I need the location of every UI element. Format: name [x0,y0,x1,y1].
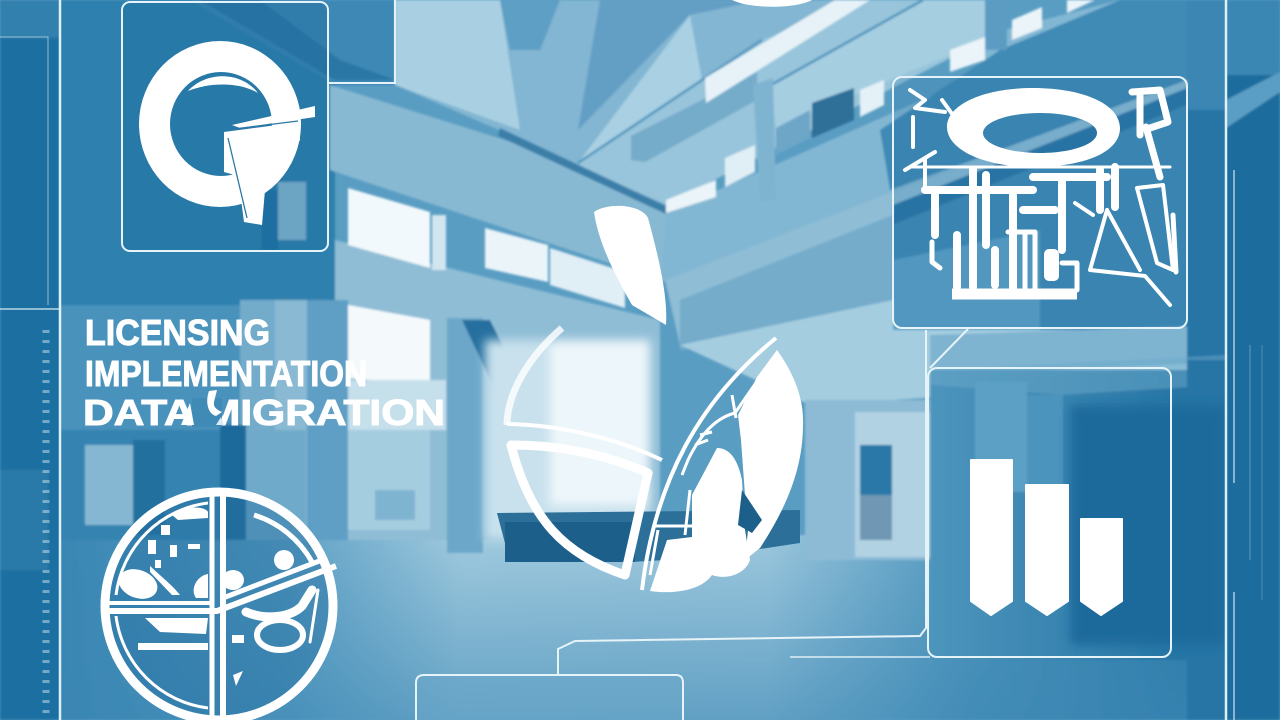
central window glow [485,340,650,540]
icon: small overlap blob on text [181,390,224,427]
upper right soffit [660,0,1226,282]
window strip one [705,0,870,103]
icon: circular G logo [139,41,315,225]
right leaf solid lobes [738,350,803,560]
left leaf outline [507,328,662,575]
structural columns [753,78,776,202]
top partial ellipse [732,0,812,7]
icon: machine schematic [905,88,1176,305]
icon: central leaf [507,206,803,592]
schematic ring [947,88,1120,167]
left dark side and upper-left wall [0,0,335,320]
far wall right of leaf [805,400,930,560]
left side panel [0,0,60,720]
icon: segmented circle emblem [104,492,336,720]
ceiling left of strips [395,0,860,165]
left windows and columns [60,305,340,540]
soft dark corner of the chart card [1070,405,1226,645]
heading: service labels: IMPLEMENTATION [85,353,367,394]
schematic pipes [905,90,1176,305]
dark furniture [497,510,800,562]
emblem backing [107,494,331,718]
right leaf veins [650,367,767,575]
floor base [0,535,1280,720]
G visor [232,106,315,128]
ceiling beam [498,128,666,214]
panel: bar chart card [928,368,1171,657]
ceiling band between window strips [578,0,985,205]
chart card backdrop [930,370,1226,660]
heading: service labels: DATA MIGRATION [83,392,445,433]
heading: service labels: LICENSING [85,312,270,353]
panel: top-left logo card [122,2,328,251]
leaf stem highlight [594,206,666,325]
G inner fill [224,122,300,225]
right side [1187,0,1226,110]
panel: top-right machine schematic card [893,77,1187,328]
connector lines [328,0,968,675]
window strip two [666,180,716,213]
right leaf outer line [642,338,776,590]
panel: bottom card outline [416,675,683,720]
bar chart [971,460,1122,615]
mid wall [665,60,1226,345]
heading: service labels [83,312,445,433]
